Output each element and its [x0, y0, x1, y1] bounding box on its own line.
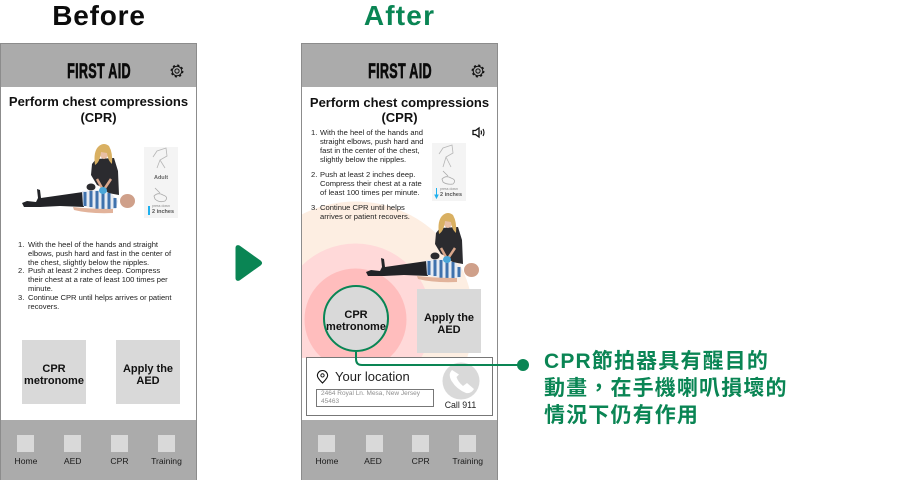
bottom navigation: AED [364, 456, 382, 466]
arrow: before to after [236, 245, 262, 281]
bottom navigation: AED [64, 456, 82, 466]
bottom navigation: Home [15, 456, 37, 466]
app header bar [1, 44, 196, 87]
app header bar: FIRST AID [67, 60, 131, 83]
call label: Call 911 [445, 400, 476, 410]
instructions list: arrives or patient recovers. [320, 212, 410, 220]
button: CPR metronome with green ring: metronome [326, 321, 386, 333]
instructions list: the chest, slightly below the nipples. [28, 258, 149, 267]
instructions list: 2. [311, 170, 317, 178]
screen title [9, 94, 188, 124]
bottom navigation: CPR [110, 456, 129, 466]
instructions list: elbows, push hard and fast in the center of [28, 249, 171, 258]
button: CPR metronome with green ring: CPR [344, 308, 368, 320]
instructions list: minute. [28, 284, 53, 293]
callout text: CPR節拍器具有醒目的 [544, 350, 769, 373]
button: CPR metronome with green ring [323, 285, 389, 352]
instructions list: their chest at a rate of least 100 times per [28, 275, 168, 284]
bottom navigation [1, 420, 196, 480]
instructions list: 3. [311, 202, 317, 212]
location label: Your location [335, 369, 410, 384]
button: CPR metronome [22, 340, 86, 404]
button: Apply the AED [116, 340, 180, 404]
instructions list: Continue CPR until helps arrives or patient [28, 293, 172, 302]
heading: Before: Before [52, 0, 146, 31]
instructions list: Push at least 2 inches deep. Compress [28, 266, 160, 275]
illustration: CPR on patient [366, 213, 479, 282]
chart card: compression depth [432, 143, 466, 201]
button: CPR metronome: metronome [24, 375, 84, 387]
radiating pulse circles [302, 202, 470, 358]
chart card: compression depth: 2 inches [440, 192, 462, 198]
instructions list: Push at least 2 inches deep. [320, 170, 415, 178]
instructions list: 3. [18, 293, 24, 302]
instructions list: straight elbows, push hard and [320, 136, 423, 146]
panel: before phone screen [0, 43, 197, 480]
instructions list: Compress their chest at a rate [320, 178, 422, 188]
screen title: Perform chest compressions [9, 94, 188, 109]
instructions list [18, 240, 172, 311]
button: Apply the AED: AED [437, 324, 461, 336]
instructions list: slightly below the nipples. [320, 154, 406, 164]
instructions list: of least 100 times per minute. [320, 188, 420, 196]
panel: after phone screen [301, 43, 498, 480]
bottom navigation: Home [316, 456, 338, 466]
bottom navigation: Training [151, 456, 182, 466]
address field [316, 389, 434, 407]
screen title: (CPR) [80, 110, 117, 124]
button: CPR metronome: CPR [42, 362, 66, 374]
heading: After: After [364, 0, 435, 31]
call button icon [442, 362, 480, 400]
app header bar: FIRST AID [368, 60, 432, 83]
chart card: adult compression depth: 2 inches [152, 209, 174, 215]
callout text: 情況下仍有作用 [544, 404, 699, 427]
instructions list: 1. [18, 240, 24, 249]
screen title [310, 94, 489, 125]
bottom navigation: CPR [412, 456, 430, 466]
instructions list: With the heel of the hands and straight [28, 240, 158, 249]
bottom navigation [302, 420, 497, 480]
instructions list: Continue CPR until helps [320, 202, 405, 212]
button: Apply the AED: Apply the [424, 312, 474, 324]
app header bar [302, 44, 497, 87]
callout text [544, 350, 788, 427]
address field: 2464 Royal Ln. Mesa, New Jersey 45463 [321, 390, 420, 404]
button: Apply the AED [417, 289, 481, 353]
screen title: (CPR) [381, 110, 418, 125]
instructions list: With the heel of the hands and [320, 128, 423, 136]
chart card: adult compression depth [144, 147, 178, 218]
button: Apply the AED: AED [136, 375, 160, 387]
chart card: compression depth: press down [440, 187, 458, 191]
chart card: adult compression depth: press down [152, 204, 170, 208]
instructions list: recovers. [28, 302, 59, 311]
chart card: adult compression depth: Adult [154, 174, 168, 180]
callout text: 動畫，在手機喇叭損壞的 [544, 377, 788, 400]
screen title: Perform chest compressions [310, 94, 489, 110]
illustration: CPR on patient [22, 144, 135, 214]
button: Apply the AED: Apply the [123, 362, 173, 374]
instructions list: fast in the center of the chest, [320, 146, 420, 154]
bottom navigation: Training [452, 456, 483, 466]
instructions list: 1. [311, 128, 317, 136]
icon: speaker [472, 126, 484, 138]
icon: map pin [316, 370, 328, 384]
instructions list [311, 128, 423, 220]
instructions list: 2. [18, 266, 24, 275]
location panel [306, 357, 493, 416]
